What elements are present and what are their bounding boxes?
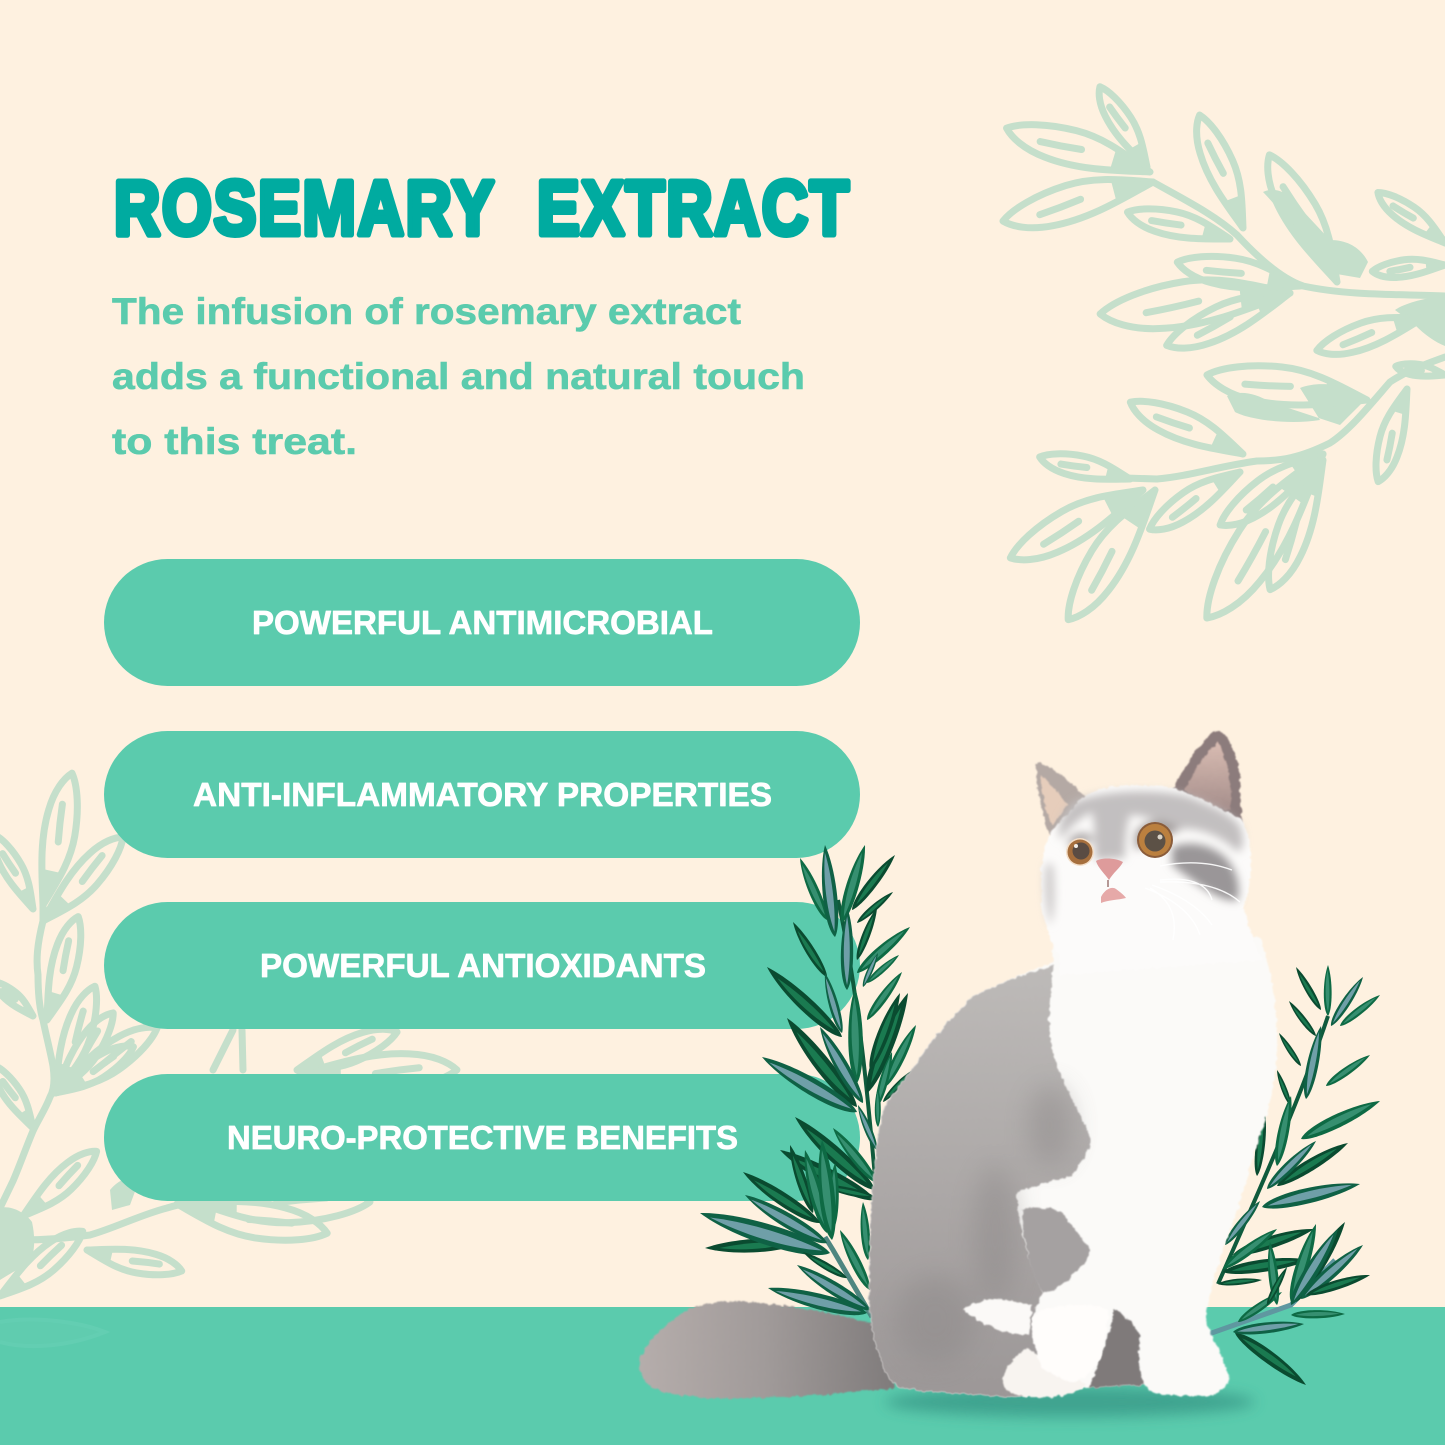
decorative leaf sprig: bottom left	[0, 770, 457, 1306]
benefit pill: powerful antioxidants: POWERFUL ANTIOXIDANTS	[260, 947, 706, 984]
cat head	[1041, 785, 1262, 975]
intro paragraph: to this treat.	[112, 421, 357, 462]
cat eyes	[1066, 822, 1173, 866]
benefit pill: anti-inflammatory properties: ANTI-INFLAMMATORY PROPERTIES	[193, 776, 772, 813]
cat shadow	[885, 1387, 1255, 1417]
cat rear white patch	[963, 1299, 1032, 1335]
cat darker fur shading	[895, 1085, 1072, 1365]
cat ears	[1037, 732, 1242, 836]
benefit pill: neuro-protective benefits: NEURO-PROTECTIVE BENEFITS	[227, 1119, 738, 1156]
cat tail	[640, 1301, 895, 1398]
cat whiskers	[1145, 863, 1240, 940]
benefit pill: powerful antioxidants	[104, 902, 860, 1029]
cat nose and mouth	[1096, 858, 1126, 903]
cat body silhouette	[869, 930, 1277, 1397]
cat shadow between legs	[1090, 1309, 1144, 1388]
cat back paw	[1002, 1348, 1086, 1397]
benefit pill: anti-inflammatory properties	[104, 731, 860, 858]
rosemary sprig: behind cat, right	[1206, 965, 1383, 1390]
intro paragraph	[112, 291, 805, 462]
ground band	[0, 1307, 1445, 1445]
intro paragraph: The infusion of rosemary extract	[112, 291, 741, 332]
cat illustration	[640, 732, 1277, 1398]
benefit pill: neuro-protective benefits	[104, 1074, 860, 1201]
cat front paw	[1032, 1305, 1108, 1382]
rosemary sprig: behind cat, left	[757, 843, 920, 1317]
decorative leaf sprig: top right	[998, 81, 1445, 631]
cat leg patch	[1022, 1208, 1091, 1292]
title: ROSEMARY	[114, 165, 496, 251]
title: EXTRACT	[537, 165, 850, 251]
cat head grey markings	[1045, 791, 1243, 925]
intro paragraph: adds a functional and natural touch	[112, 356, 805, 397]
benefit pill: powerful antimicrobial	[104, 559, 860, 686]
rosemary sprig: behind cat, lower left	[697, 1139, 874, 1321]
benefit pill: powerful antimicrobial: POWERFUL ANTIMICROBIAL	[252, 604, 713, 641]
cat grey back patch	[869, 965, 1091, 1397]
